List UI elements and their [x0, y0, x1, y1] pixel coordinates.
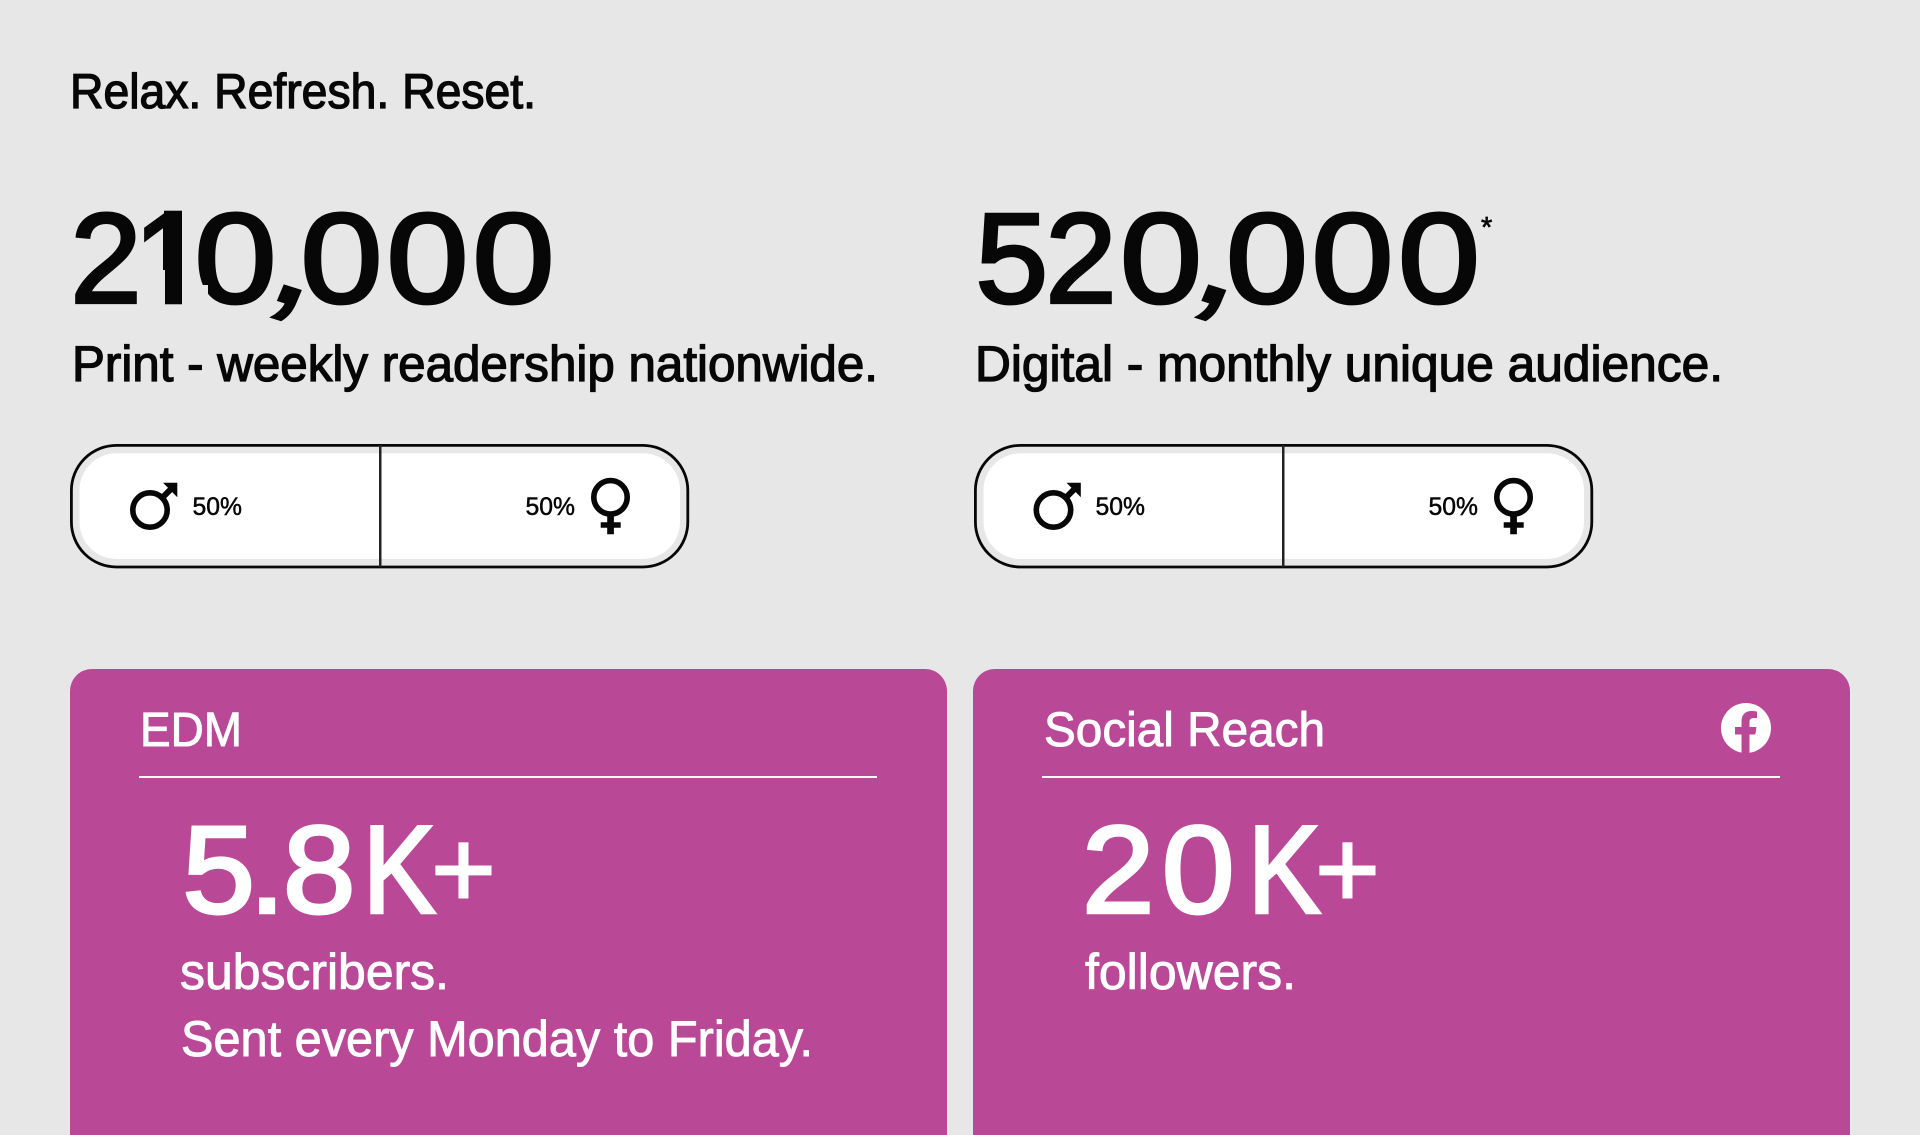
social reach number: 2 [1082, 802, 1154, 940]
EDM number: 8 [283, 802, 355, 940]
digital number: 2 [1045, 188, 1117, 330]
print number [75, 210, 551, 322]
print number: 2 [70, 188, 142, 330]
panel: social reach [973, 669, 1850, 1135]
print number: 0 [300, 188, 382, 330]
panel: EDM [70, 669, 947, 1135]
social reach number: K [1248, 802, 1320, 940]
EDM description line 2: Sent every Monday to Friday. [181, 1011, 813, 1067]
asterisk footnote mark: * [1481, 212, 1492, 244]
digital number: 0 [1226, 188, 1308, 330]
EDM description line 1: subscribers. [180, 944, 449, 1000]
icon: female symbol [1497, 481, 1530, 534]
icon: male symbol [133, 483, 177, 527]
social reach number: 0 [1162, 802, 1234, 940]
EDM number: + [431, 808, 496, 931]
male percentage: 50% [1096, 493, 1145, 521]
icon: male symbol [1036, 483, 1081, 527]
male percentage: 50% [192, 493, 242, 521]
digital number: 0 [1120, 188, 1202, 330]
social reach number: + [1315, 808, 1380, 931]
print readership stat [70, 188, 878, 392]
social reach description: followers. [1085, 944, 1296, 1000]
print number: 0 [386, 188, 468, 330]
gender split pill: digital [975, 445, 1592, 567]
icon: facebook [1721, 703, 1771, 753]
title: Relax. Refresh. Reset. [70, 65, 536, 119]
digital number: 0 [1312, 188, 1393, 330]
social reach heading: Social Reach [1044, 704, 1325, 757]
EDM number: K [363, 802, 435, 940]
female percentage: 50% [526, 493, 575, 521]
digital audience stat [975, 188, 1723, 392]
EDM number: 5 [182, 802, 255, 940]
digital description: Digital - monthly unique audience. [975, 336, 1723, 392]
print description: Print - weekly readership nationwide. [72, 336, 878, 392]
digital number: , [1184, 201, 1263, 334]
print number: 0 [194, 188, 276, 330]
EDM number: . [249, 802, 285, 940]
female percentage: 50% [1428, 493, 1478, 521]
icon: female symbol [594, 481, 627, 534]
digital number: 5 [976, 188, 1048, 330]
print number: , [260, 201, 338, 334]
print number: 0 [472, 188, 554, 330]
digital number: 0 [1398, 188, 1480, 330]
print number: 1 [134, 188, 202, 330]
EDM heading: EDM [140, 704, 242, 757]
gender split pill: print [71, 445, 688, 567]
